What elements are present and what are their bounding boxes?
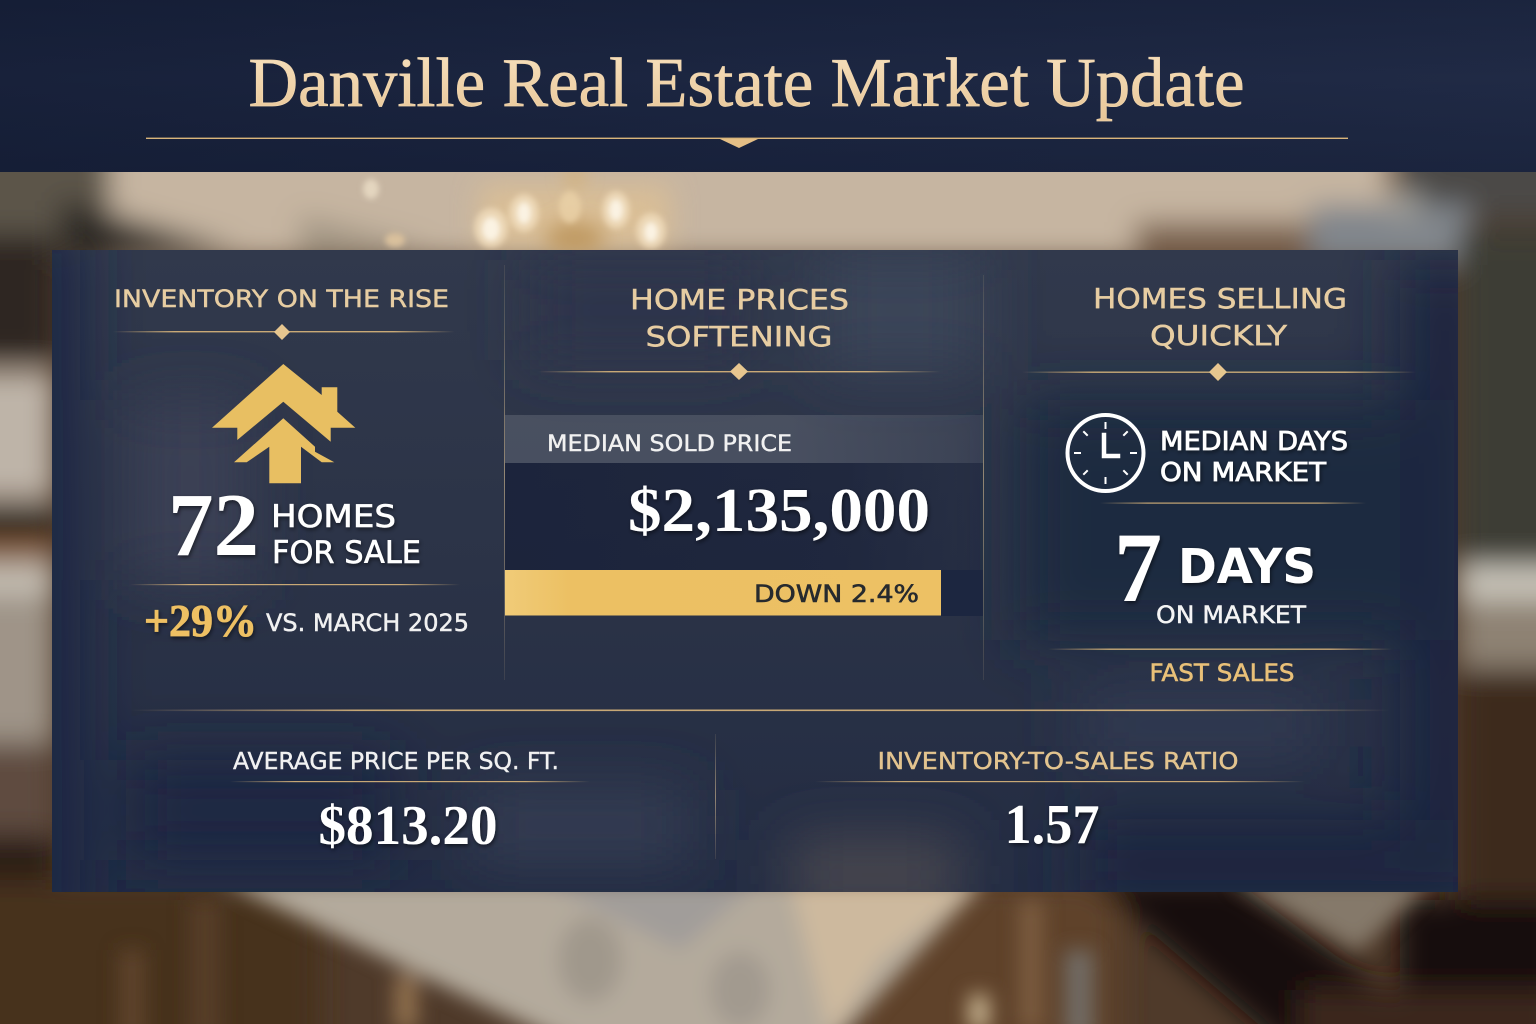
price heading: [630, 283, 849, 353]
panel texture: [52, 250, 1458, 892]
median sold price band: MEDIAN SOLD PRICE: [547, 432, 792, 457]
floor: [0, 880, 320, 1024]
right strip: [1458, 230, 1536, 565]
label: on market: ON MARKET: [1156, 601, 1306, 629]
stat: inventory-to-sales ratio: [815, 749, 1305, 856]
speed heading: QUICKLY: [1150, 319, 1288, 352]
label: median days on market: ON MARKET: [1160, 458, 1326, 488]
label: fast sales: FAST SALES: [1150, 659, 1294, 687]
median sold price band: [505, 415, 983, 463]
sofa leg: [1232, 880, 1432, 952]
stat: average price per sq ft: AVERAGE PRICE PER SQ. FT.: [233, 749, 559, 775]
speed heading: [1093, 282, 1347, 352]
inventory heading: INVENTORY ON THE RISE: [114, 285, 449, 313]
price value panel: $2,135,000: [628, 477, 930, 545]
left strip: [0, 235, 55, 360]
rug: [220, 880, 985, 1024]
icon: clock: [1068, 415, 1144, 491]
stat: average price per sq ft: [230, 749, 590, 857]
speed value: 7 days: DAYS: [1178, 539, 1316, 595]
label: homes for sale: [271, 499, 421, 571]
column: inventory on the rise: [113, 285, 469, 646]
inventory heading rule: [113, 324, 455, 340]
price value panel: [505, 463, 983, 570]
price heading rule: [538, 363, 940, 380]
label: homes for sale: HOMES: [271, 499, 396, 535]
inventory value: 72: 72: [168, 476, 259, 575]
main dashboard panel: [52, 250, 1458, 892]
top title band: [0, 0, 1536, 172]
title underline with pointer: [146, 138, 1348, 148]
speed heading rule: [1022, 363, 1416, 381]
column: homes selling quickly: [1022, 282, 1416, 687]
column: home prices softening: [505, 283, 983, 616]
label: median days on market: MEDIAN DAYS: [1160, 427, 1348, 457]
speed value: 7 days: [1114, 512, 1316, 623]
column dividers: [504, 265, 984, 680]
speed heading: HOMES SELLING: [1093, 282, 1347, 315]
down 2.4% bar: DOWN 2.4%: [754, 580, 919, 608]
title: Danville Real Estate Market Update: [248, 45, 1244, 122]
stat: inventory-to-sales ratio: 1.57: [1004, 794, 1100, 856]
change: +29% vs March 2025: +29%: [144, 595, 257, 646]
price heading: HOME PRICES: [630, 283, 849, 316]
ceiling: [86, 172, 1414, 250]
label: median days on market: [1160, 427, 1348, 488]
price heading: SOFTENING: [646, 320, 832, 353]
icon: house with up arrow: [212, 364, 355, 483]
stat: inventory-to-sales ratio: INVENTORY-TO-SALES RATIO: [878, 749, 1238, 775]
change: +29% vs March 2025: [144, 595, 469, 646]
chandelier: [363, 168, 670, 254]
floor highlights: [190, 900, 220, 1024]
down 2.4% bar: [505, 570, 983, 616]
change: +29% vs March 2025: VS. MARCH 2025: [266, 609, 469, 637]
label: homes for sale: FOR SALE: [272, 535, 421, 571]
stat: average price per sq ft: $813.20: [318, 795, 498, 857]
speed value: 7 days: 7: [1114, 512, 1162, 623]
